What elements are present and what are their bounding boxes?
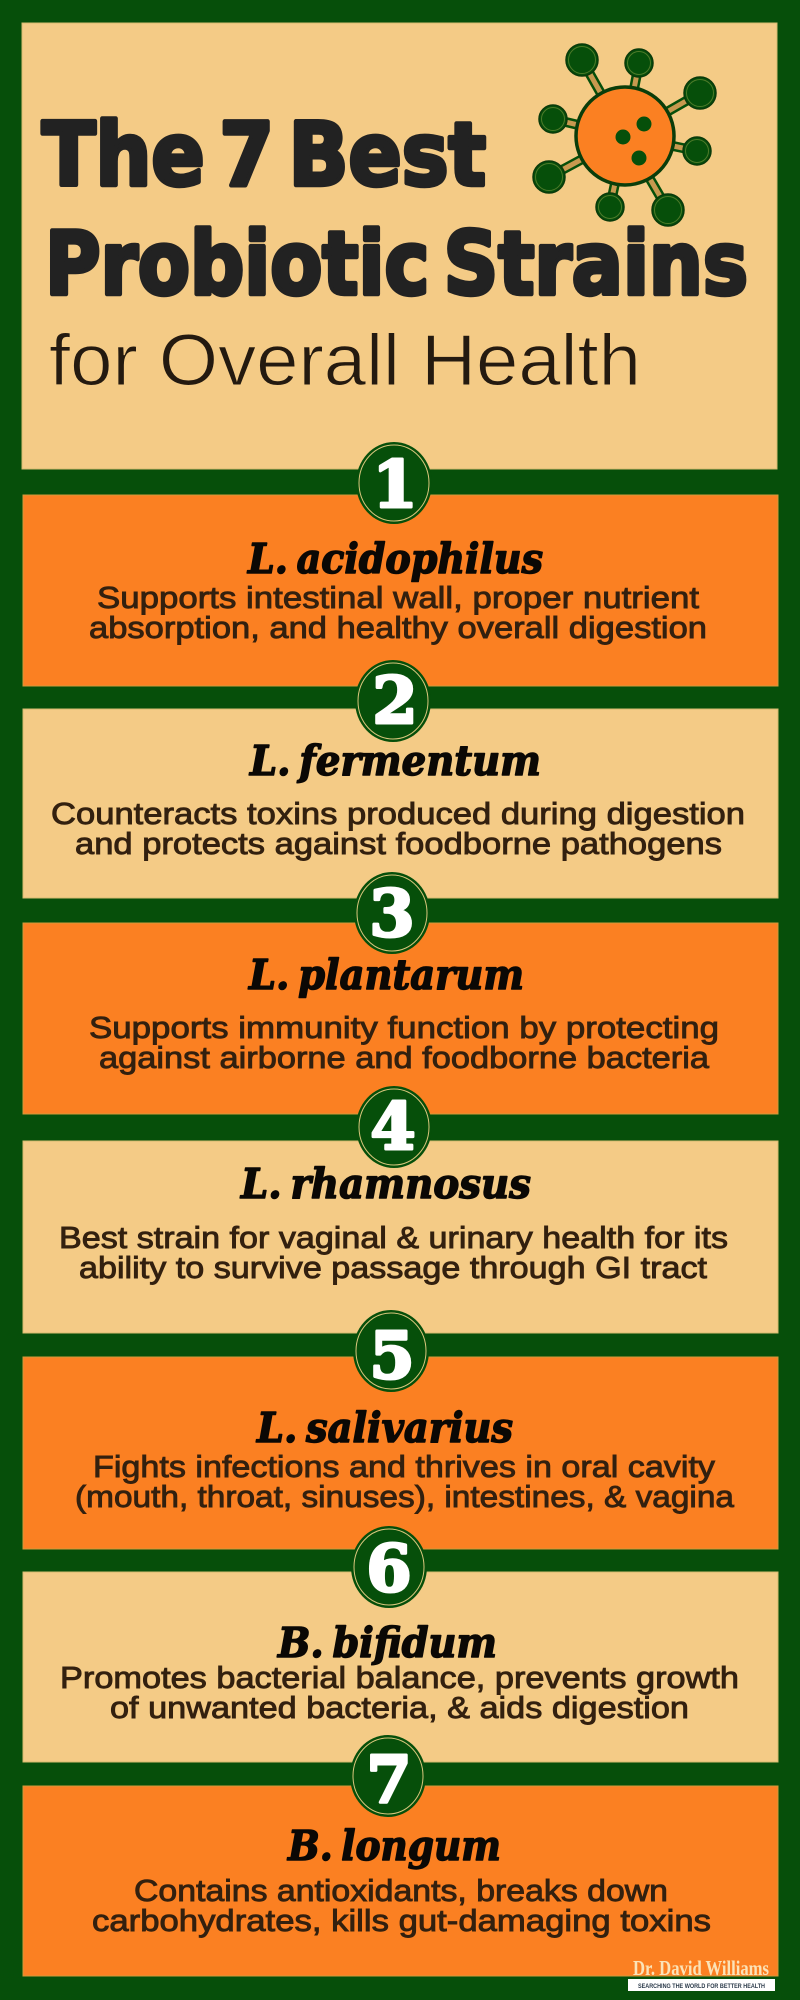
strain name: L. fermentum [249, 737, 541, 785]
description: (mouth, throat, sinuses), intestines, & vagina [75, 1479, 735, 1514]
panel: L. rhamnosus [23, 1141, 778, 1333]
description: absorption, and healthy overall digestion [89, 610, 707, 645]
description: Supports immunity function by protecting [89, 1010, 719, 1045]
title: The 7 Best: The 7 Best [42, 104, 486, 206]
badge: 4 [356, 1086, 432, 1168]
strain name: L. rhamnosus [240, 1160, 531, 1208]
logo: Dr. David Williams [628, 1956, 775, 1991]
description: and protects against foodborne pathogens [75, 826, 722, 861]
badge: 7: 7 [366, 1742, 412, 1818]
badge: 4: 4 [370, 1089, 416, 1165]
panel: L. salivarius [23, 1357, 778, 1549]
description: Supports intestinal wall, proper nutrient [97, 580, 699, 615]
badge: 2: 2 [372, 663, 418, 739]
strain name: L. salivarius [256, 1404, 513, 1452]
icon: bacterium [533, 44, 716, 226]
panel: L. plantarum [23, 923, 778, 1114]
badge: 3 [354, 872, 430, 954]
badge: 2 [355, 660, 431, 742]
logo: Dr. David Williams: Dr. David Williams [633, 1956, 769, 1980]
description: against airborne and foodborne bacteria [99, 1040, 710, 1075]
description: Counteracts toxins produced during digestion [51, 796, 745, 831]
strain name: L. plantarum [248, 951, 524, 999]
panel: B. bifidum [23, 1572, 778, 1762]
description: of unwanted bacteria, & aids digestion [110, 1690, 689, 1725]
description: ability to survive passage through GI tract [79, 1250, 707, 1285]
badge: 5: 5 [369, 1318, 415, 1394]
strain name: B. bifidum [277, 1619, 497, 1667]
panel: header [22, 23, 777, 469]
description: Best strain for vaginal & urinary health for its [59, 1220, 728, 1255]
panel: B. longum [23, 1786, 778, 1976]
badge: 6 [351, 1526, 427, 1608]
badge: 7 [350, 1735, 426, 1818]
badge: 1: 1 [372, 447, 418, 523]
subtitle: for Overall Health [49, 321, 641, 401]
description: Fights infections and thrives in oral cavity [93, 1449, 716, 1484]
panel: L. fermentum [23, 709, 778, 898]
strain name: L. acidophilus [247, 535, 543, 583]
badge: 1 [356, 442, 432, 524]
logo: Dr. David Williams: SEARCHING THE WORLD FOR BETTER HEALTH [638, 1984, 765, 1990]
description: carbohydrates, kills gut-damaging toxins [92, 1903, 711, 1938]
badge: 3: 3 [369, 876, 415, 952]
panel: L. acidophilus [23, 495, 778, 686]
description: Contains antioxidants, breaks down [134, 1873, 668, 1908]
description: Promotes bacterial balance, prevents growth [60, 1660, 739, 1695]
strain name: B. longum [287, 1822, 501, 1870]
badge: 6: 6 [366, 1531, 412, 1607]
badge: 5 [353, 1310, 429, 1394]
